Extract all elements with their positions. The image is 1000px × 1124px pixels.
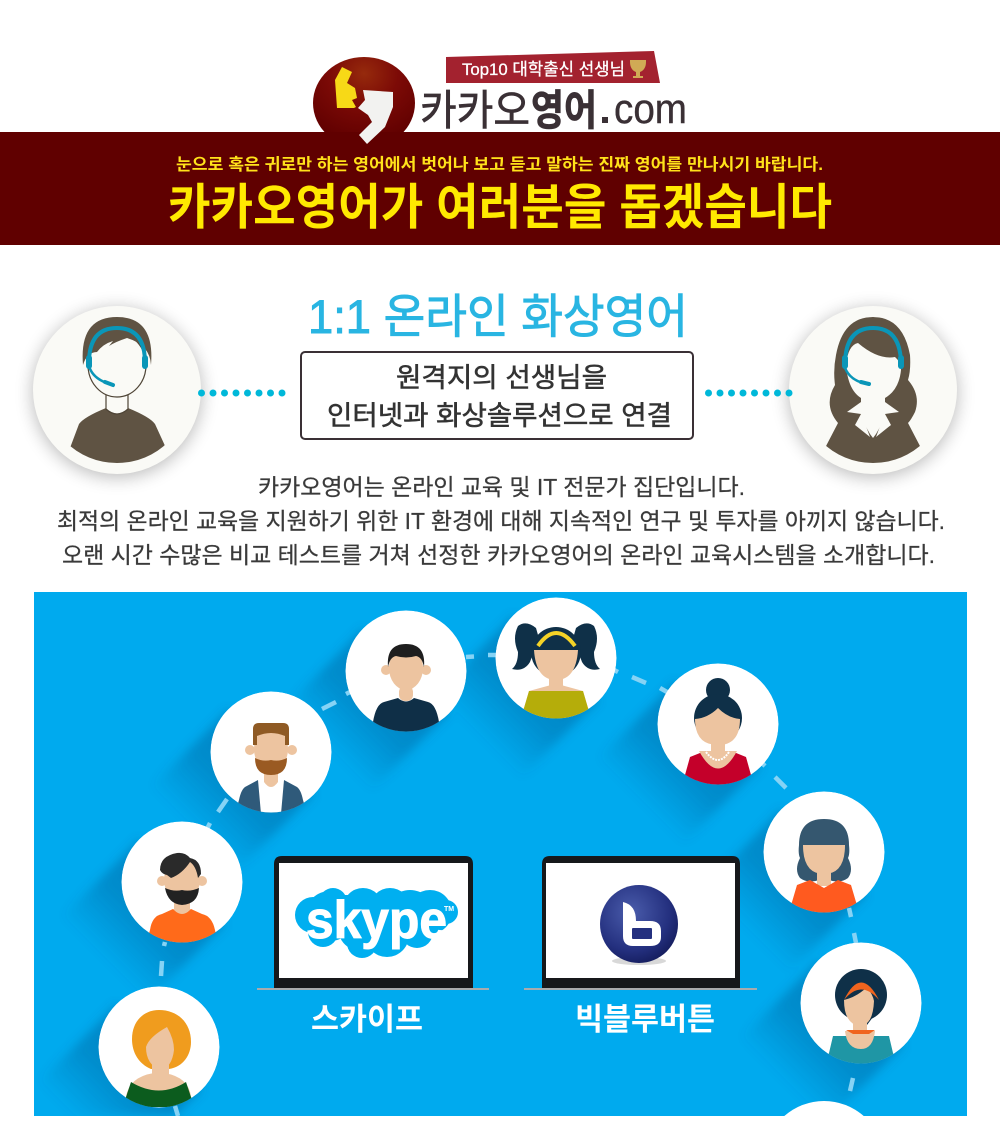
avatar: partially visible circle xyxy=(784,1101,864,1116)
label: skype: 스카이프 xyxy=(311,1002,423,1037)
intro text: 오랜 시간 수많은 비교 테스트를 거쳐 선정한 카카오영어의 온라인 교육시스템을 소개합니다. xyxy=(62,542,935,568)
avatar: brown hair man with jacket xyxy=(210,692,332,814)
skype logo: TM xyxy=(444,906,454,913)
icon: logo speaking faces xyxy=(335,67,393,144)
avatar: female tutor with headset xyxy=(789,306,957,477)
connection description box: 원격지의 선생님을 xyxy=(396,363,607,393)
logo wordmark: com xyxy=(614,85,687,132)
dashed network path xyxy=(161,655,856,1116)
header subtitle: 눈으로 혹은 귀로만 하는 영어에서 벗어나 보고 듣고 말하는 진짜 영어를 만나시기 바랍니다. xyxy=(176,155,823,174)
dotted connector right xyxy=(705,390,792,396)
avatar: woman with hair bun xyxy=(658,664,778,786)
label: bigbluebutton: 빅블루버튼 xyxy=(575,1002,715,1037)
connection description box xyxy=(301,352,693,439)
bigbluebutton logo xyxy=(600,885,678,965)
section title: 1:1 온라인 화상영어 xyxy=(308,290,688,343)
avatar: girl with pigtails xyxy=(496,598,616,720)
logo wordmark xyxy=(420,85,687,134)
header title: 카카오영어가 여러분을 돕겠습니다 xyxy=(168,181,832,235)
rank badge: Top10 대학출신 선생님 xyxy=(462,60,625,79)
rank badge xyxy=(446,51,660,83)
logo emblem circle xyxy=(313,57,415,149)
skype logo: skype xyxy=(306,891,447,950)
avatar: bearded man orange shirt xyxy=(122,822,242,944)
avatar: black hair man xyxy=(346,610,466,733)
dotted connector left xyxy=(198,390,286,396)
logo wordmark: 카카오 xyxy=(420,87,530,134)
circle long shadows xyxy=(39,616,903,1116)
header band xyxy=(0,132,1000,245)
panel: online classroom xyxy=(34,592,967,1116)
logo wordmark: 영어 xyxy=(531,87,597,134)
intro text: 최적의 온라인 교육을 지원하기 위한 IT 환경에 대해 지속적인 연구 및 투자를 아끼지 않습니다. xyxy=(57,508,945,534)
connection description box: 인터넷과 화상솔루션으로 연결 xyxy=(327,401,672,431)
avatar: blonde woman xyxy=(98,986,220,1108)
intro text: 카카오영어는 온라인 교육 및 IT 전문가 집단입니다. xyxy=(258,474,745,500)
avatar: male tutor with headset xyxy=(33,306,201,477)
avatar: woman with orange headband xyxy=(800,942,922,1065)
laptop: bigbluebutton xyxy=(524,856,757,990)
avatar: woman with wavy dark hair xyxy=(764,792,884,914)
laptop: skype xyxy=(257,856,489,990)
logo xyxy=(313,51,687,149)
intro text xyxy=(57,474,945,568)
